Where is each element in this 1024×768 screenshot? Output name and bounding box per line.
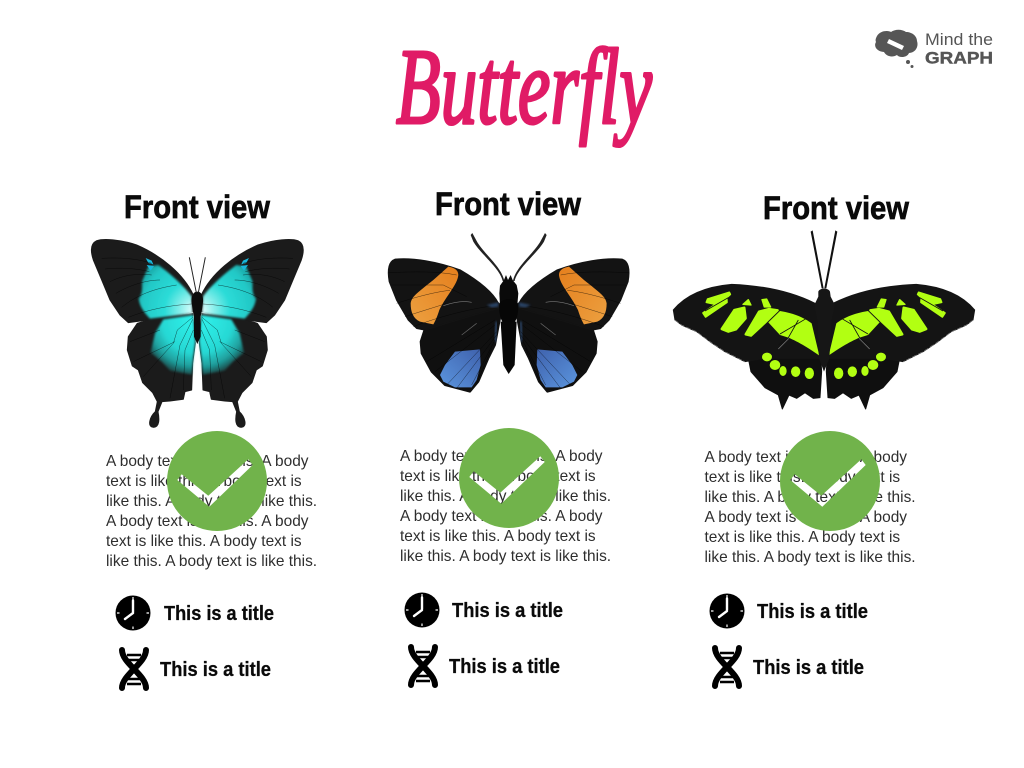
icon: DNA [411, 647, 435, 685]
label: This is a title [757, 601, 868, 623]
check badge [167, 431, 267, 531]
check badge [459, 428, 559, 528]
icon: DNA [122, 650, 146, 688]
butterfly: orange and blue [388, 233, 629, 392]
icon: clock [116, 596, 150, 630]
title: Butterfly [396, 28, 652, 147]
butterfly: blue swallowtail [91, 239, 303, 427]
body text: A body text is like this. A body [400, 448, 603, 465]
check badge [780, 431, 880, 531]
body text: A body text is like this. A body [400, 508, 603, 525]
body text: like this. A body text is like this. [704, 549, 916, 566]
body text: text is like this. A body text is [106, 473, 302, 490]
panel: column 2 [388, 186, 629, 685]
label: This is a title [160, 659, 271, 681]
body text: A body text is like this. A body [704, 449, 907, 466]
body text [400, 448, 611, 565]
body text: text is like this. A body text is [400, 528, 596, 545]
icon: brain [875, 30, 918, 68]
body text: like this. A body text is like this. [400, 548, 611, 565]
icon: clock [710, 594, 744, 628]
label: This is a title [164, 603, 274, 625]
label: This is a title [452, 600, 563, 622]
body text [704, 449, 916, 566]
panel: column 3 [673, 190, 975, 686]
logo: Mind the Graph: GRAPH [925, 50, 993, 68]
logo text: Mind the [925, 31, 993, 49]
body text: text is like this. A body text is [106, 533, 302, 550]
body text: like this. A body text is like this. [106, 553, 317, 570]
body text: like this. A body text is like this. [400, 488, 611, 505]
heading: Front view [124, 189, 270, 225]
body text: like this. A body text is like this. [106, 493, 317, 510]
body text: text is like this. A body text is [704, 469, 900, 486]
icon: DNA [715, 648, 739, 686]
panel: column 1 [91, 189, 317, 688]
heading: Front view [763, 190, 909, 226]
label: This is a title [753, 657, 864, 679]
body text: A body text is like this. A body [106, 513, 309, 530]
butterfly: malachite green [673, 230, 975, 409]
heading: Front view [435, 186, 581, 222]
label: This is a title [449, 656, 560, 678]
body text: A body text is like this. A body [704, 509, 907, 526]
body text: text is like this. A body text is [704, 529, 900, 546]
body text: A body text is like this. A body [106, 453, 309, 470]
body text [106, 453, 317, 570]
icon: clock [404, 592, 440, 628]
logo: Mind the Graph [875, 30, 993, 68]
body text: text is like this. A body text is [400, 468, 596, 485]
body text: like this. A body text is like this. [704, 489, 916, 506]
